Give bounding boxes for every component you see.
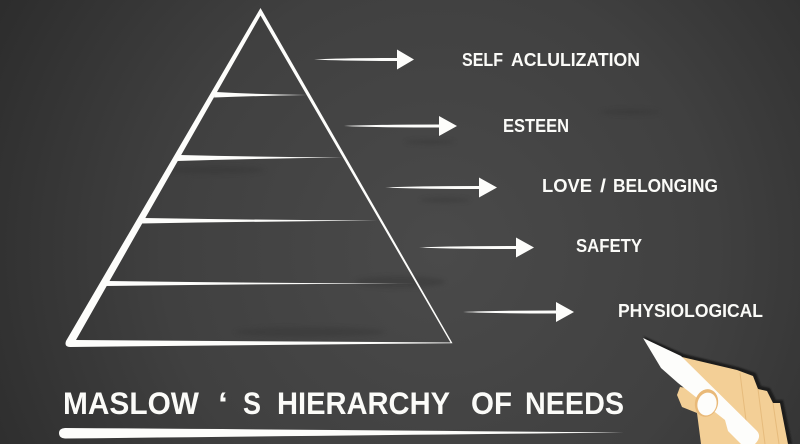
label: love and belonging: LOVE — [542, 176, 592, 196]
arrow 2 — [344, 116, 457, 136]
pyramid outline — [66, 8, 452, 347]
title underline — [59, 428, 624, 438]
arrow 4 — [419, 238, 534, 258]
tier divider 1 — [214, 92, 307, 98]
arrow 1 — [314, 50, 414, 70]
chalk — [643, 338, 759, 444]
title: ‘ — [218, 385, 228, 421]
title: S — [243, 385, 261, 421]
title: MASLOW — [63, 385, 199, 421]
label: esteem: ESTEEN — [503, 116, 569, 136]
hand — [677, 357, 788, 444]
tier divider 2 — [177, 155, 343, 161]
label: physiological: PHYSIOLOGICAL — [618, 301, 763, 321]
thumbnail — [695, 390, 719, 418]
icon: hand holding chalk — [643, 336, 792, 444]
label: love and belonging — [542, 176, 718, 196]
tier divider 3 — [141, 218, 378, 224]
thumb ring — [692, 387, 721, 419]
label: self actualization: SELF — [462, 50, 503, 70]
label: safety: SAFETY — [576, 236, 642, 256]
title: HIERARCHY — [277, 385, 450, 421]
label: love and belonging: / — [600, 176, 606, 196]
tier divider 4 — [105, 281, 417, 286]
hand shadow — [643, 336, 792, 444]
arrow 3 — [385, 178, 497, 198]
label: love and belonging: BELONGING — [613, 176, 718, 196]
pyramid — [66, 8, 452, 347]
title — [63, 385, 624, 421]
label: self actualization: ACLULIZATION — [511, 50, 640, 70]
title: OF — [471, 385, 512, 421]
title: NEEDS — [525, 385, 624, 421]
finger creases — [740, 373, 779, 444]
arrow 5 — [463, 302, 574, 322]
